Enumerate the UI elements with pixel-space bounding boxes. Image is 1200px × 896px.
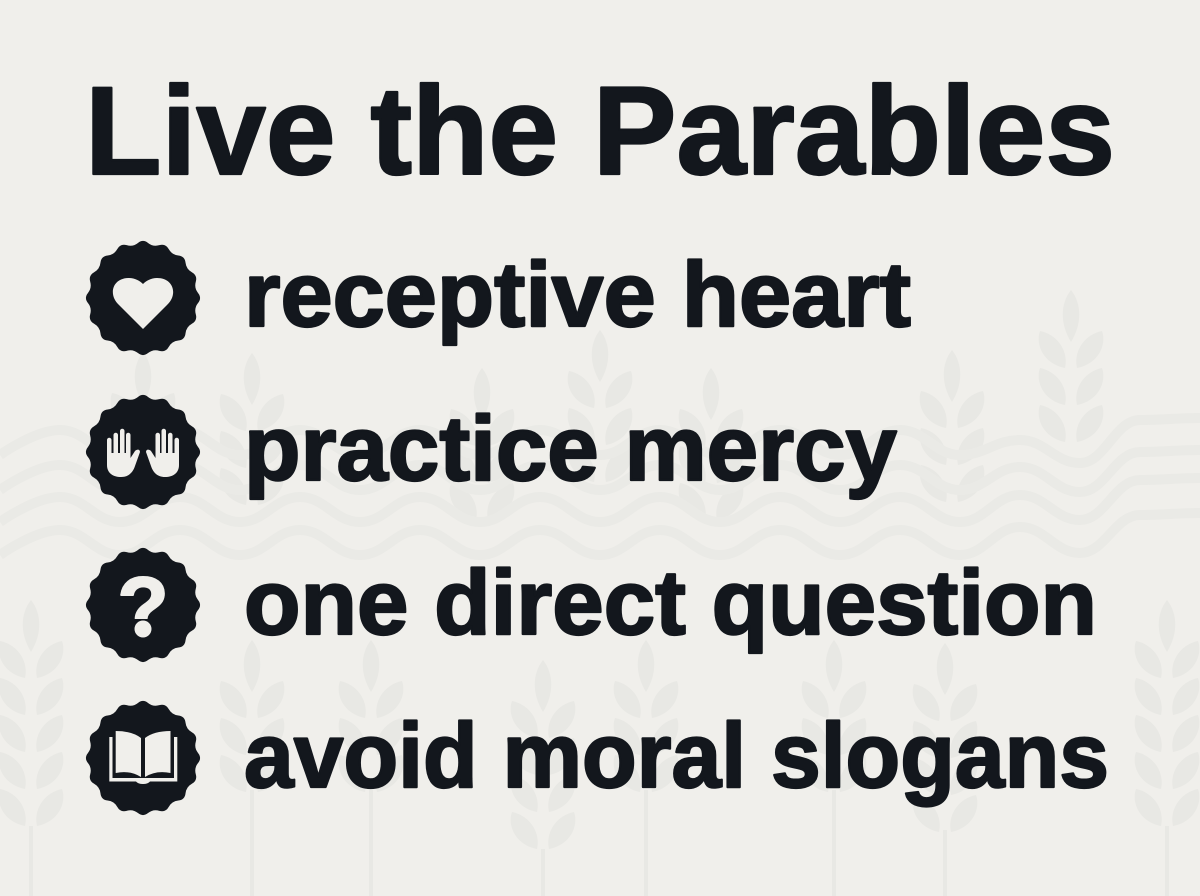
icon: heart badge	[86, 241, 200, 355]
icon: question mark badge: ?	[117, 560, 169, 654]
icon: question mark badge	[86, 548, 200, 662]
background: wavy soil bands	[0, 418, 1200, 555]
row 3: one direct question	[86, 548, 1097, 662]
background: wheat stalks, upper row	[111, 290, 1103, 520]
title: Live the Parables	[85, 62, 1115, 201]
label: one direct question: one direct question	[244, 552, 1097, 654]
icon: open book badge	[86, 701, 200, 815]
row 2: practice mercy	[86, 395, 897, 509]
label: avoid moral slogans: avoid moral slogans	[244, 705, 1109, 807]
row 1: receptive heart	[86, 241, 911, 355]
icon: raised hands badge	[86, 395, 200, 509]
label: practice mercy: practice mercy	[244, 398, 897, 500]
label: receptive heart: receptive heart	[244, 244, 911, 346]
background: wheat stalks, lower row	[0, 600, 1199, 896]
row 4: avoid moral slogans	[86, 701, 1109, 815]
